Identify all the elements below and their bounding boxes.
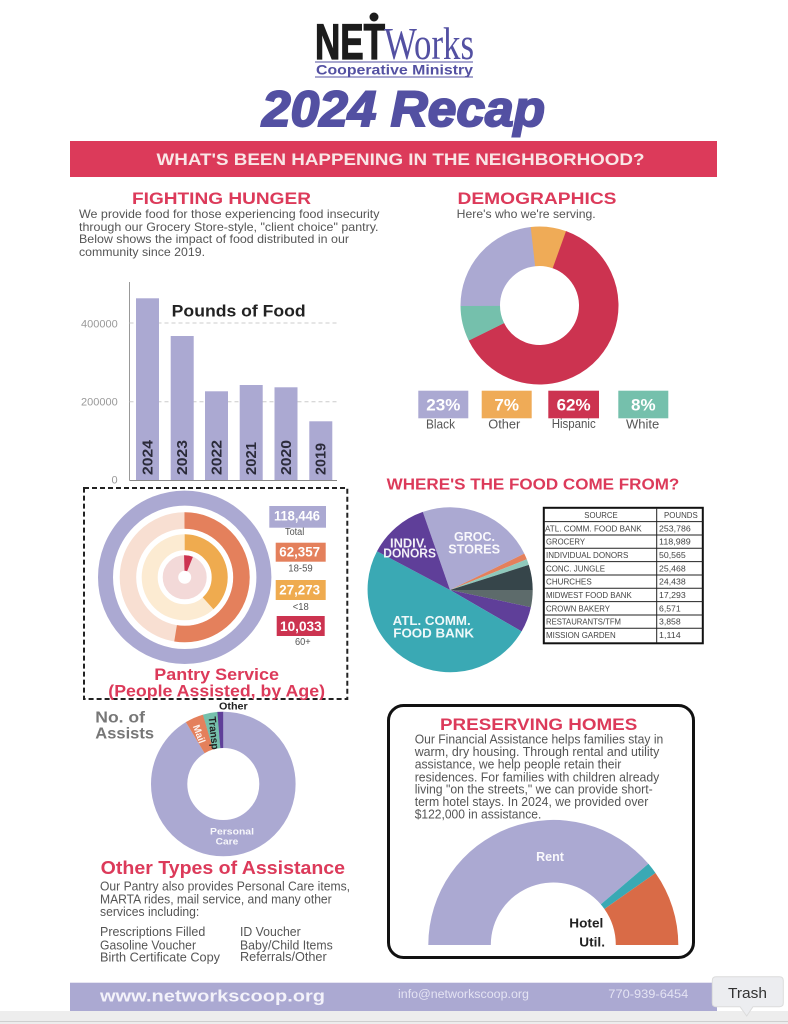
panel: pantry service (84, 488, 347, 701)
label: no. of assists: Assists (95, 726, 154, 743)
heading: other types of assistance: Other Types of Assistance (101, 858, 345, 878)
list: additional services (100, 925, 333, 965)
donut chart: number of assists: Transp (206, 716, 221, 750)
table: food sources in pounds: 3,858 (659, 618, 681, 627)
table: food sources in pounds: CROWN BAKERY (546, 604, 611, 613)
tooltip: Trash: Trash (728, 985, 767, 1002)
text: fighting hunger description: through our Grocery Store-style, "client choice" pantry. (79, 220, 378, 234)
heading: where's the food come from: WHERE'S THE FOOD COME FROM? (387, 476, 679, 493)
legend: age groups: 62,357 (279, 544, 320, 560)
bar chart: pounds of food: Pounds of Food (172, 302, 306, 321)
pie chart: food sources: STORES (448, 541, 500, 556)
text: other assistance description: services including: (100, 905, 199, 919)
table: food sources in pounds: 50,565 (659, 551, 686, 560)
legend: demographics percentages: 7% (494, 396, 519, 414)
bar chart: pounds of food: 400000 (81, 318, 118, 330)
legend: demographics percentages: White (626, 416, 659, 432)
table: food sources in pounds: 6,571 (659, 604, 681, 613)
donut chart: number of assists: Mail (190, 723, 207, 745)
table: food sources in pounds: GROCERY (546, 538, 586, 547)
bar chart: pounds of food: 0 (112, 474, 118, 486)
heading: demographics: DEMOGRAPHICS (458, 189, 616, 208)
heading: fighting hunger: FIGHTING HUNGER (132, 189, 311, 208)
legend: demographics percentages (418, 391, 668, 432)
pie chart: food sources: INDIV. (390, 536, 427, 550)
legend: age groups: 60+ (295, 637, 311, 648)
list: additional services: ID Voucher (240, 925, 301, 939)
table: food sources in pounds: 25,468 (659, 564, 686, 573)
bar chart: pounds of food: 200000 (81, 397, 118, 409)
pie chart: food sources: DONORS (383, 547, 436, 561)
tooltip: Trash (712, 977, 783, 1016)
title: 2024 Recap: 2024 Recap (261, 81, 545, 137)
table: food sources in pounds (544, 508, 703, 643)
logo: NETworks Cooperative Ministry: NET (315, 14, 385, 70)
legend: age groups: <18 (293, 602, 309, 613)
footer bar: contact details: info@networkscoop.org (398, 989, 529, 1001)
footer bar: contact details (0, 983, 788, 1024)
table: food sources in pounds: MIDWEST FOOD BANK (546, 591, 632, 600)
legend: age groups (269, 506, 326, 648)
donut chart: number of assists: Personal (210, 826, 254, 837)
gauge chart: financial assistance: Util. (579, 936, 605, 950)
list: additional services: Gasoline Voucher (100, 938, 196, 952)
pie chart: food sources: FOOD BANK (393, 626, 475, 641)
bar chart: pounds of food: 2024 (139, 439, 156, 475)
legend: demographics percentages: Black (426, 416, 455, 432)
bar chart: pounds of food: 2023 (174, 440, 191, 475)
heading: pantry service (108, 666, 325, 701)
text: preserving homes description: living "on the streets," we can provide short- (415, 782, 653, 796)
text: preserving homes description: term hotel stays. In 2024, we provided over (415, 795, 648, 809)
table: food sources in pounds: 17,293 (659, 591, 686, 600)
pie chart: food sources: ATL. COMM. (393, 613, 471, 628)
footer bar: contact details: 770-939-6454 (608, 989, 689, 1001)
label: no. of assists (95, 710, 154, 743)
gauge chart: financial assistance: Hotel (569, 917, 603, 931)
footer bar: contact details: www.networkscoop.org (99, 987, 325, 1006)
text: preserving homes description: Our Financial Assistance helps families stay in (415, 732, 663, 746)
logo: NETworks Cooperative Ministry (315, 12, 474, 78)
text: other assistance description (100, 880, 350, 919)
list: additional services: Referrals/Other (240, 950, 327, 964)
logo: NETworks Cooperative Ministry: Works (384, 18, 474, 69)
text: preserving homes description: assistance, we help people retain their (415, 757, 621, 771)
text: fighting hunger description (79, 207, 379, 259)
legend: age groups: Total (285, 527, 304, 538)
label: no. of assists: No. of (95, 710, 146, 727)
table: food sources in pounds: RESTAURANTS/TFM (546, 618, 621, 627)
list: additional services: Birth Certificate Copy (100, 951, 221, 965)
text: preserving homes description: residences. For families with children already (415, 771, 660, 785)
bar chart: pounds of food: 2020 (278, 440, 295, 475)
table: food sources in pounds: CONC. JUNGLE (546, 564, 605, 573)
table: food sources in pounds: ATL. COMM. FOOD BANK (545, 524, 642, 533)
legend: demographics percentages: 8% (631, 396, 656, 414)
table: food sources in pounds: POUNDS (664, 511, 698, 520)
list: additional services: Baby/Child Items (240, 938, 333, 952)
logo: NETworks Cooperative Ministry: Cooperative Ministry (316, 62, 474, 78)
donut chart: demographics (460, 226, 619, 385)
gauge chart: financial assistance: Rent (536, 850, 565, 864)
table: food sources in pounds: CHURCHES (546, 578, 592, 587)
table: food sources in pounds: 253,786 (659, 524, 691, 533)
text: preserving homes description (414, 732, 663, 821)
heading: preserving homes: PRESERVING HOMES (440, 715, 637, 734)
donut chart: number of assists: Other (219, 701, 248, 712)
pie chart: food sources: GROC. (454, 529, 495, 544)
table: food sources in pounds: 1,114 (659, 631, 681, 640)
table: food sources in pounds: 24,438 (659, 578, 686, 587)
panel: preserving homes (388, 706, 694, 958)
table: food sources in pounds: MISSION GARDEN (546, 631, 616, 640)
donut chart: number of assists (149, 701, 298, 858)
text: fighting hunger description: We provide food for those experiencing food insecurity (79, 207, 379, 221)
legend: age groups: 10,033 (280, 618, 322, 634)
banner: what's been happening (70, 141, 717, 177)
text: fighting hunger description: community since 2019. (79, 245, 205, 259)
heading: pantry service: Pantry Service (154, 666, 279, 684)
bar chart: pounds of food: 2021 (243, 442, 260, 475)
legend: age groups: 18-59 (288, 564, 313, 575)
heading: pantry service: (People Assisted, by Age) (108, 683, 325, 701)
table: food sources in pounds: INDIVIDUAL DONORS (546, 551, 628, 560)
list: additional services: Prescriptions Filled (100, 925, 205, 939)
legend: age groups: 27,273 (279, 581, 320, 597)
banner: what's been happening: WHAT'S BEEN HAPPENING IN THE NEIGHBORHOOD? (156, 150, 644, 169)
legend: age groups: 118,446 (274, 508, 320, 524)
table: food sources in pounds: SOURCE (584, 511, 618, 520)
radial chart: people assisted by age (106, 498, 264, 656)
legend: demographics percentages: Hispanic (552, 416, 596, 431)
text: preserving homes description: $122,000 in assistance. (415, 807, 541, 821)
legend: demographics percentages: 62% (557, 396, 591, 414)
bar chart: pounds of food: 2022 (208, 440, 226, 475)
table: food sources in pounds: 118,989 (659, 538, 691, 547)
gauge chart: financial assistance (428, 820, 678, 950)
text: fighting hunger description: Below shows the impact of food distributed in our (79, 232, 349, 246)
legend: demographics percentages: 23% (426, 396, 460, 414)
text: preserving homes description: warm, dry housing. Through rental and utility (414, 745, 660, 759)
legend: demographics percentages: Other (488, 416, 521, 432)
text: demographics intro: Here's who we're serving. (457, 207, 596, 221)
bar chart: pounds of food: 2019 (312, 443, 330, 475)
donut chart: number of assists: Care (216, 836, 238, 848)
text: other assistance description: Our Pantry also provides Personal Care items, (100, 880, 350, 894)
bar chart: pounds of food (81, 282, 337, 486)
pie chart: food sources (368, 507, 533, 672)
text: other assistance description: MARTA rides, mail service, and many other (100, 892, 332, 906)
